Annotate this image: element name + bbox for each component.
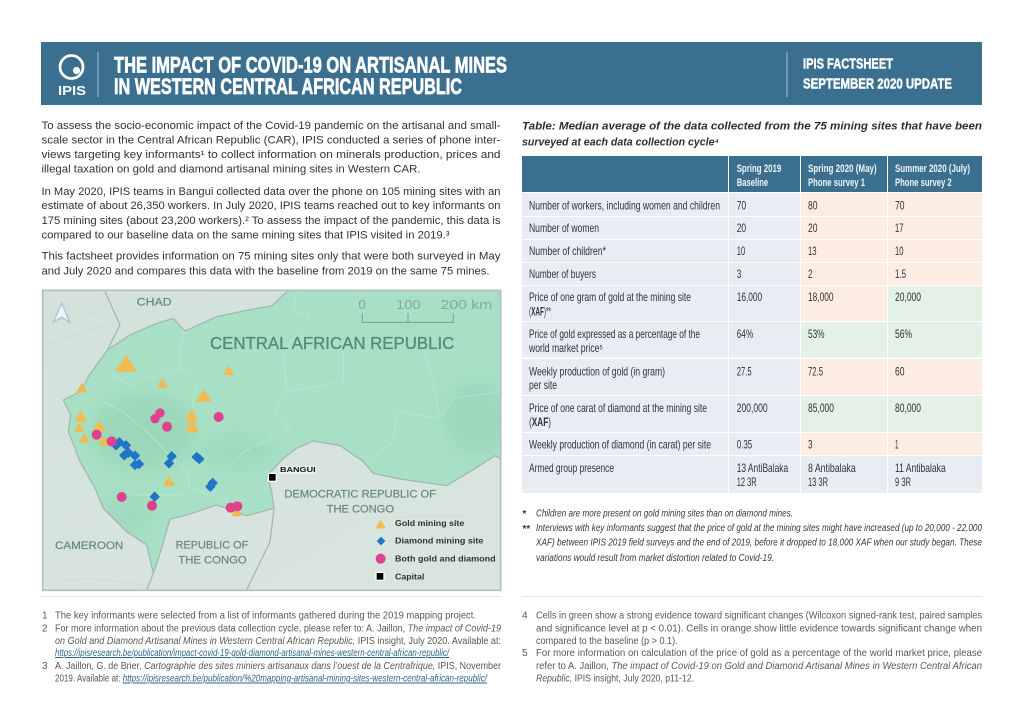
table values: Spring 2020 phone survey 1: 2 — [808, 268, 812, 281]
table row labels: (XAF) — [529, 416, 551, 429]
scale bar: 100 — [396, 297, 421, 312]
scale bar: 0 — [358, 297, 366, 312]
header banner — [41, 42, 982, 105]
table values: Spring 2020 phone survey 1: 53% — [808, 328, 824, 341]
land: Central African Republic — [64, 291, 500, 571]
table values: Summer 2020 phone survey 2: 20,000 — [895, 291, 921, 304]
intro text: scale sector in the Central African Republic (CAR), IPIS conducted a series of phone inter- — [42, 134, 501, 146]
table values: Summer 2020 phone survey 2: 60 — [895, 366, 904, 378]
table row labels: Armed group presence — [529, 462, 614, 475]
map legend — [375, 518, 496, 581]
table values: Summer 2020 phone survey 2: 10 — [895, 245, 904, 258]
intro text: 175 mining sites (about 23,200 workers).² To assess the impact of the pandemic, this data is — [42, 215, 501, 227]
icon: north arrow — [53, 303, 70, 322]
table values: Summer 2020 phone survey 2: 9 3R — [895, 476, 911, 489]
gold mining sites — [76, 357, 240, 515]
table row labels: Weekly production of gold (in gram) — [529, 366, 665, 378]
map labels: CAMEROON — [55, 540, 123, 552]
table values: Summer 2020 phone survey 2: 17 — [895, 222, 904, 235]
table values: Summer 2020 phone survey 2: 1.5 — [895, 268, 906, 281]
table header row: Baseline — [737, 177, 768, 189]
table row labels: world market price⁵ — [528, 342, 603, 355]
table title: surveyed at each data collection cycle⁴ — [522, 136, 719, 148]
table title — [522, 120, 983, 148]
footnotes 1 to 3: 2019. Available at: https://ipisresearch.be/publication/%20mapping-artisanal-mining-sites-western-central-african-republic/ — [55, 674, 488, 684]
table notes — [522, 508, 982, 564]
map labels: REPUBLIC OF — [176, 539, 249, 551]
table notes: * — [522, 509, 527, 520]
table values: Spring 2019 baseline: 27.5 — [737, 366, 752, 378]
capital marker: Bangui — [268, 466, 316, 482]
intro text — [42, 120, 501, 278]
footnotes 1 to 3: 3 — [42, 661, 48, 672]
factsheet label: IPIS FACTSHEET — [803, 55, 893, 72]
intro text: compared to our baseline data on the same mining sites that IPIS visited in 2019.³ — [42, 229, 450, 241]
table values: Spring 2020 phone survey 1: 20 — [808, 222, 818, 235]
table values: Summer 2020 phone survey 2: 11 Antibalaka — [895, 462, 946, 475]
map labels: THE CONGO — [327, 503, 394, 515]
table values: Summer 2020 phone survey 2: 70 — [895, 200, 904, 212]
map — [43, 290, 507, 590]
footnotes 1 to 3: https://ipisresearch.be/publication/impact-covid-19-gold-diamond-artisanal-mines-western-central-african-republic/ — [55, 648, 450, 659]
intro text: illegal taxation on gold and diamond artisanal mining sites in Western CAR. — [42, 164, 421, 176]
footnotes 1 to 3 — [42, 610, 502, 684]
table row labels: (XAF)** — [529, 306, 551, 318]
table header row: Phone survey 1 — [808, 177, 865, 189]
table values: Spring 2020 phone survey 1: 13 — [808, 245, 816, 258]
diamond mining sites — [112, 438, 217, 501]
table values: Spring 2019 baseline: 12 3R — [737, 476, 757, 489]
footnotes 4 and 5: refer to A. Jaillon, The impact of Covid-19 on Gold and Diamond Artisanal Mines in Western Central African — [536, 661, 982, 672]
scale bar: 200 km — [441, 297, 492, 312]
table row labels: Price of one carat of diamond at the mining site — [529, 402, 707, 415]
table row labels: Number of workers, including women and children — [529, 200, 720, 212]
table notes: variations would result from market distortion related to Covid-19. — [536, 553, 774, 564]
table notes: Children are more present on gold mining sites than on diamond mines. — [536, 508, 793, 520]
title: IN WESTERN CENTRAL AFRICAN REPUBLIC — [114, 74, 462, 99]
map labels: CENTRAL AFRICAN REPUBLIC — [210, 333, 454, 353]
map labels: THE CONGO — [178, 554, 247, 566]
map legend: Both gold and diamond — [395, 554, 496, 564]
table title: Table: Median average of the data collected from the 75 mining sites that have been — [522, 120, 983, 132]
table cell backgrounds — [522, 193, 982, 493]
map labels — [55, 296, 454, 566]
title: THE IMPACT OF COVID-19 ON ARTISANAL MINES — [114, 52, 507, 77]
table values: Spring 2020 phone survey 1: 72.5 — [808, 366, 823, 378]
footnotes 4 and 5: and significance level at p < 0.01). Cells in orange show little evidence towards significant change when — [536, 624, 982, 634]
table values: Summer 2020 phone survey 2: 80,000 — [895, 402, 921, 415]
table values: Spring 2020 phone survey 1: 3 — [808, 438, 812, 452]
intro text: In May 2020, IPIS teams in Bangui collected data over the phone on 105 mining sites with an — [42, 186, 500, 198]
table header row: Phone survey 2 — [895, 177, 952, 189]
table values: Summer 2020 phone survey 2: 1 — [895, 438, 898, 452]
map labels: DEMOCRATIC REPUBLIC OF — [284, 489, 436, 501]
table row labels: Number of buyers — [529, 268, 596, 281]
table values: Summer 2020 phone survey 2: 56% — [895, 328, 912, 341]
intro text: To assess the socio-economic impact of the Covid-19 pandemic on the artisanal and small- — [42, 120, 501, 132]
table row labels: Number of children* — [529, 245, 606, 258]
map legend: Capital — [395, 571, 424, 581]
table values: Spring 2019 baseline: 3 — [737, 268, 741, 281]
footnotes 1 to 3: 1 — [42, 610, 48, 622]
table row labels: Weekly production of diamond (in carat) per site — [529, 438, 711, 452]
icon: IPIS logo — [58, 56, 86, 98]
table row labels — [528, 200, 720, 475]
table values: Spring 2019 baseline: 13 AntiBalaka — [737, 462, 789, 475]
footnotes 1 to 3: 2 — [42, 624, 48, 634]
table values: Spring 2019 baseline: 64% — [737, 328, 753, 341]
factsheet label — [803, 55, 952, 92]
map legend: Diamond mining site — [395, 536, 484, 546]
table values: Spring 2020 phone survey 1: 85,000 — [808, 402, 834, 415]
table header row: Spring 2019 — [737, 163, 781, 175]
intro text: This factsheet provides information on 75 mining sites only that were both surveyed in May — [42, 251, 501, 263]
table values: Spring 2019 baseline: 70 — [737, 200, 746, 212]
footnotes 4 and 5: 5 — [522, 648, 528, 659]
footnotes 1 to 3: on Gold and Diamond Artisanal Mines in Western Central African Republic, IPIS insight, July 2020. Available at: — [55, 636, 501, 647]
intro text: views targeting key informants¹ to collect information on minerals production, prices and — [42, 149, 500, 161]
table header row — [522, 156, 982, 192]
table row labels: Price of one gram of gold at the mining site — [529, 291, 691, 304]
table header row: Summer 2020 (July) — [895, 163, 970, 175]
table values: Spring 2020 phone survey 1: 18,000 — [808, 291, 834, 304]
footnotes 1 to 3: For more information about the previous data collection cycle, please refer to: A. Jaillon, The impact of Covid-19 — [55, 624, 501, 634]
both gold and diamond sites — [92, 408, 242, 513]
table values: Spring 2020 phone survey 1: 80 — [808, 200, 818, 212]
table values: Spring 2020 phone survey 1: 8 Antibalaka — [808, 462, 856, 475]
table values: Spring 2020 phone survey 1: 13 3R — [808, 476, 828, 489]
table values: Spring 2019 baseline: 200,000 — [737, 402, 768, 415]
table row labels: Number of women — [529, 222, 599, 235]
footnotes 4 and 5: 4 — [522, 610, 528, 622]
scale bar — [358, 297, 492, 322]
factsheet label: SEPTEMBER 2020 UPDATE — [803, 75, 952, 92]
table values: Spring 2019 baseline: 20 — [737, 222, 746, 235]
table values: Spring 2019 baseline — [737, 200, 789, 489]
intro text: and July 2020 and compares this data with the baseline from 2019 on the same 75 mines. — [42, 266, 490, 278]
footnotes 4 and 5: Cells in green show a strong evidence toward significant changes (Wilcoxon signed-rank test, paired samples — [536, 610, 982, 622]
table values: Spring 2019 baseline: 16,000 — [737, 291, 762, 304]
table values: Spring 2020 phone survey 1 — [808, 200, 856, 489]
table values: Summer 2020 phone survey 2 — [895, 200, 946, 489]
footnotes 4 and 5: For more information on calculation of the price of gold as a percentage of the world market price, please — [536, 648, 982, 659]
footnotes 4 and 5: compared to the baseline (p > 0.1). — [536, 636, 678, 647]
title — [114, 52, 507, 99]
footnotes 1 to 3: The key informants were selected from a list of informants gathered during the 2019 mapping project. — [55, 610, 476, 622]
table notes: ** — [522, 524, 531, 535]
capital marker: Bangui: BANGUI — [280, 467, 316, 474]
intro text: estimate of about 26,350 workers. In July 2020, IPIS teams reached out to key informants on — [42, 200, 501, 212]
country borders — [63, 290, 501, 590]
table row labels: per site — [529, 379, 557, 392]
map labels: CHAD — [137, 296, 172, 308]
data table — [522, 156, 982, 493]
footnotes 1 to 3: A. Jaillon, G. de Brier, Cartographie des sites miniers artisanaux dans l’ouest de la Centrafrique, IPIS, November — [55, 661, 502, 672]
table values: Spring 2019 baseline: 10 — [737, 245, 745, 258]
table row labels: Price of gold expressed as a percentage of the — [529, 328, 700, 341]
map legend: Gold mining site — [395, 518, 465, 528]
icon: IPIS logo: IPIS — [58, 83, 86, 98]
table values: Spring 2019 baseline: 0.35 — [737, 438, 752, 452]
footnotes 4 and 5 — [522, 610, 982, 684]
footnotes 4 and 5: Republic, IPIS insight, July 2020, p11-12. — [536, 674, 694, 684]
table header row: Spring 2020 (May) — [808, 163, 877, 175]
